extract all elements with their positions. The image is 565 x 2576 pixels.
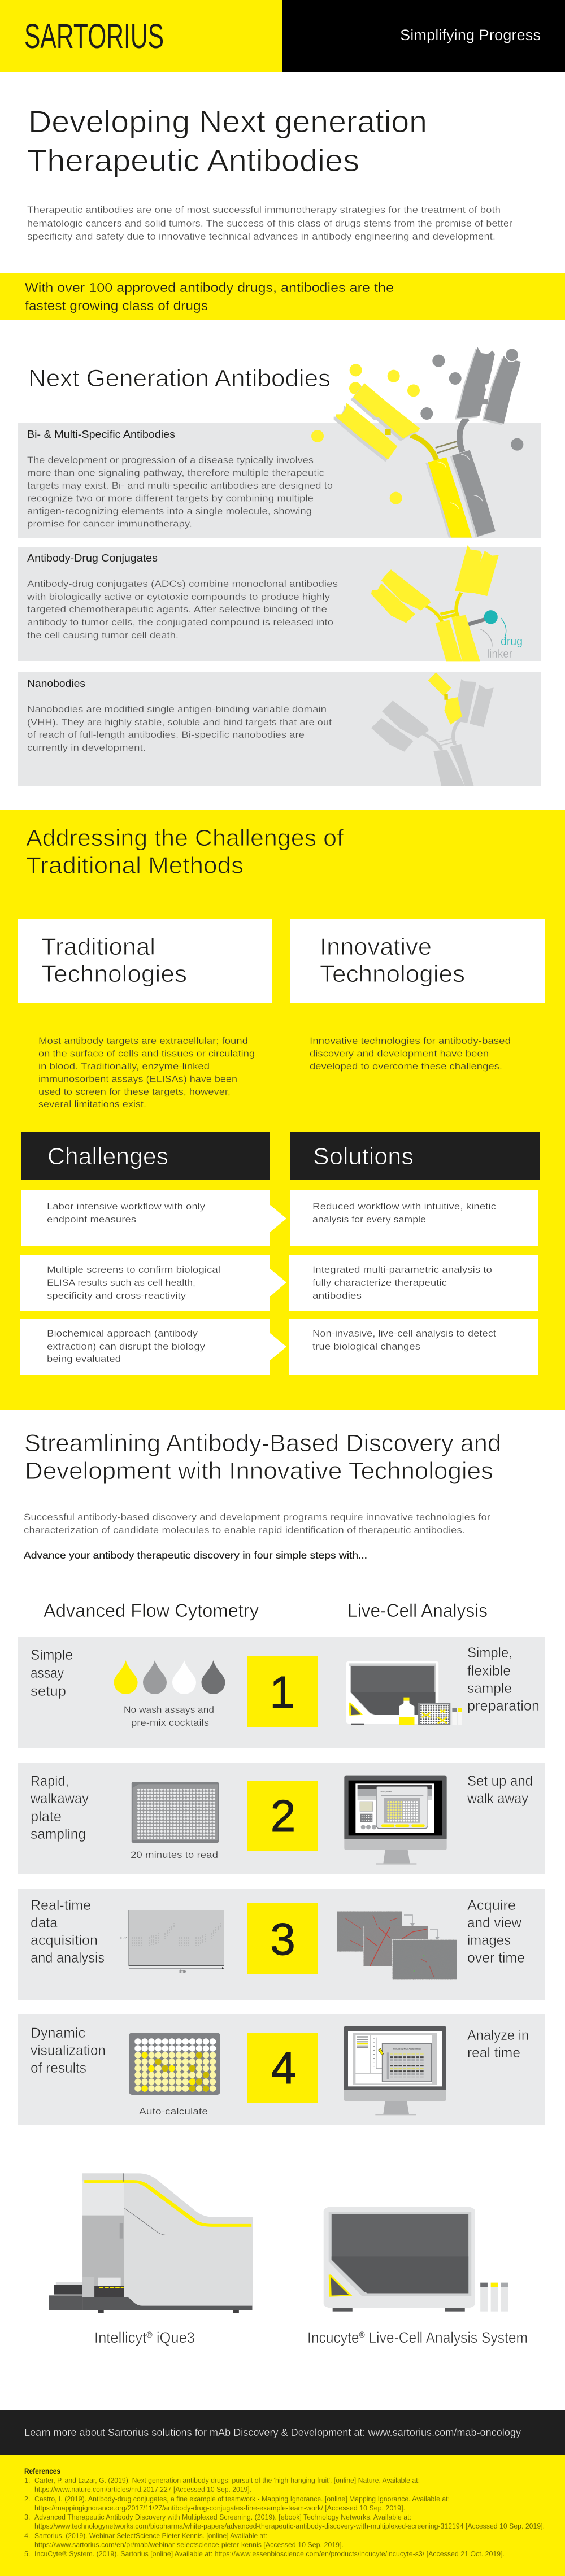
text: innovative methods: Innovative technologies for antibody-based (310, 1035, 511, 1046)
section heading (26, 825, 344, 878)
callout band: approved antibody drugs (0, 273, 565, 320)
yellow antigens (311, 364, 420, 504)
panel body text: Nanobodies are modified single antigen-binding variable domain (27, 704, 327, 715)
heading: streamlining discovery: Streamlining Antibody-Based Discovery and (24, 1430, 501, 1457)
solution card 2 (289, 1255, 538, 1311)
panel heading: Bi- & Multi-Specific Antibodies (27, 428, 175, 440)
grey bound antigen (506, 349, 518, 362)
challenge card 1 with arrow: Labor intensive workflow with only (47, 1201, 206, 1212)
reference list: https://mappingignorance.org/2017/11/27/antibody-drug-conjugates-fine-example-team-work/ [Accessed 10 Sep. 2019]. (34, 2504, 405, 2512)
label: drug: drug (501, 636, 523, 648)
step 1 left label: Simple (31, 1647, 73, 1663)
header: tagline band (282, 0, 565, 72)
reference list: Carter, P. and Lazar, G. (2019). Next generation antibody drugs: pursuit of the 'high-hanging fruit'. [online] Nature. Available at: (34, 2477, 420, 2484)
card: traditional technologies (18, 919, 272, 1003)
panel: antibody-drug conjugates (18, 547, 541, 661)
section heading: Addressing the Challenges of (26, 825, 344, 851)
label: Incucyte system: ® (359, 2330, 365, 2340)
step 2 right label (467, 1773, 533, 1807)
card: innovative technologies (290, 919, 545, 1003)
step 1 right label: flexible (467, 1663, 511, 1679)
reference list: 5. (24, 2550, 30, 2558)
challenge card 3 with arrow: being evaluated (47, 1354, 121, 1364)
panel body text: recognize two or more different targets by combining multiple (27, 493, 314, 504)
illustration: nanobody (371, 672, 494, 786)
step 1 right label (467, 1645, 540, 1714)
intro paragraph: Therapeutic antibodies are one of most successful immunotherapy strategies for the treatment of both (27, 204, 501, 215)
grey antigens (420, 355, 523, 451)
solution card 2: fully characterize therapeutic (312, 1277, 447, 1288)
panel body text: antigen-recognizing elements into a single molecule, showing (27, 506, 312, 516)
reference list: 2. (24, 2495, 30, 2503)
text: traditional methods: in blood. Traditionally, enzyme-linked (38, 1061, 210, 1072)
step 4 right label: real time (467, 2045, 520, 2061)
step number 1: 1 (270, 1667, 295, 1717)
step 4 left label: Dynamic (31, 2025, 85, 2041)
header: solutions: Solutions (313, 1143, 414, 1169)
step 2 right label: Set up and (467, 1773, 533, 1789)
icon: monitor with assay analysis software: IncuCyte Spheroid Assay Analysis (393, 2048, 421, 2050)
illustration: iQue3 instrument (49, 2173, 253, 2313)
label: Incucyte system: Incucyte (307, 2329, 364, 2346)
icon: 384-well plate (132, 1782, 219, 1843)
plate stage (49, 2282, 82, 2310)
header: challenges (21, 1132, 270, 1180)
panel: bi- and multi-specific antibodies (18, 423, 541, 538)
window bezel (329, 2212, 471, 2296)
base (82, 2297, 252, 2310)
step 3 left label (31, 1898, 105, 1966)
axis labels: Time (178, 1969, 186, 1974)
panel body text: promise for cancer immunotherapy. (27, 519, 192, 529)
step 2 left label: Rapid, (31, 1773, 69, 1789)
step number 4: 4 (271, 2043, 296, 2093)
step 2 left label: sampling (31, 1826, 86, 1842)
step 2 left label: walkaway (30, 1791, 89, 1807)
illustration: bispecific antibody with antigens (311, 347, 523, 538)
text: traditional methods: several limitations exist. (38, 1099, 146, 1109)
panel: step 2 (18, 1763, 545, 1874)
axis labels (120, 1935, 186, 1974)
text: traditional methods (38, 1035, 255, 1109)
step 1 right label: sample (467, 1681, 512, 1696)
window (332, 2214, 468, 2293)
antibody arms and stems (371, 545, 499, 661)
header: solutions (290, 1132, 540, 1180)
panel body text: Antibody-drug conjugates (ADCs) combine monoclonal antibodies (27, 578, 338, 589)
solution card 2: Integrated multi-parametric analysis to (312, 1264, 492, 1275)
chart: IL-2 over time (120, 1910, 224, 1974)
yellow arms (336, 383, 420, 459)
text: innovative methods: discovery and development have been (310, 1048, 489, 1059)
heading: streamlining discovery (24, 1430, 501, 1485)
reference list: Castro, I. (2019). Antibody-drug conjugates, a fine example of teamwork - Mapping Ignorance. [online] Mapping Ignorance. Available at: (34, 2495, 450, 2503)
panel: step 3 (18, 1889, 545, 2000)
intro paragraph: specificity and safety due to innovative technical advances in antibody engineering and development. (27, 231, 496, 242)
logo: Sartorius: SARTORIUS (24, 17, 164, 55)
step 4 left label: of results (31, 2060, 86, 2076)
left column (82, 2173, 124, 2297)
panel: nanobodies (18, 672, 541, 786)
panel body text (27, 578, 338, 641)
label: Intellicyt iQue3: iQue3 (153, 2329, 195, 2346)
streamlining paragraph (24, 1512, 490, 1535)
panel: step 4 (18, 2014, 545, 2125)
heading: next generation antibodies: Next Generation Antibodies (28, 365, 331, 392)
heading: streamlining discovery: Development with Innovative Technologies (25, 1457, 493, 1485)
header: challenges: Challenges (47, 1143, 168, 1169)
step 4 left label: visualization (31, 2043, 106, 2059)
footer band: learn more (0, 2410, 565, 2455)
panel body text: of reach of full-length antibodies. Bi-specific nanobodies are (27, 729, 305, 740)
panel body text (27, 704, 332, 753)
antibody hinges (421, 593, 461, 623)
reference list: https://www.nature.com/articles/nrd.2017.227 [Accessed 10 Sep. 2019]. (34, 2486, 251, 2494)
panel body text (27, 455, 333, 529)
step number 4 (247, 2033, 318, 2103)
section: addressing the challenges (0, 810, 565, 1410)
data points (132, 1923, 221, 1946)
intro paragraph: hematologic cancers and solid tumors. The success of this class of drugs stems from the promise of better (27, 218, 512, 229)
step 1 right label: Simple, (467, 1645, 512, 1661)
tagline: Simplifying Progress (400, 27, 541, 43)
challenge card 3 with arrow (20, 1319, 286, 1375)
step 3 right label: over time (467, 1950, 525, 1966)
step 3 right label: images (467, 1933, 511, 1948)
challenge card 2 with arrow (20, 1255, 286, 1311)
panel body text: with biologically active or cytotoxic compounds to produce highly (27, 591, 331, 602)
step 1 left label: setup (31, 1683, 66, 1699)
drug linker rod (467, 619, 486, 625)
lead-in line: Advance your antibody therapeutic discovery in four simple steps with... (24, 1550, 367, 1561)
card: traditional technologies: Traditional (41, 933, 155, 960)
axis labels: IL-2 (120, 1935, 127, 1940)
text: innovative methods (310, 1035, 511, 1072)
text: innovative methods: developed to overcome these challenges. (310, 1061, 502, 1072)
yellow stem (428, 457, 472, 538)
step 2 right label: walk away (467, 1791, 528, 1807)
card: traditional technologies: Technologies (41, 960, 187, 987)
callout band: approved antibody drugs: fastest growing class of drugs (25, 298, 208, 313)
step 3 left label: acquisition (31, 1933, 98, 1948)
card: innovative technologies: Innovative (320, 933, 432, 960)
icon: results plate (129, 2033, 220, 2095)
yellow stripe (84, 2182, 251, 2225)
panel body text: currently in development. (27, 742, 146, 753)
step 1 right label: preparation (467, 1698, 540, 1714)
housing (324, 2207, 475, 2308)
panel body text: more than one signaling pathway, therefore multiple therapeutic (27, 468, 325, 478)
title: Therapeutic Antibodies (27, 143, 359, 178)
grey arms (457, 347, 521, 424)
step 4 left label (31, 2025, 106, 2076)
challenge card 3 with arrow: Biochemical approach (antibody (47, 1328, 198, 1339)
panel heading: Antibody-Drug Conjugates (27, 552, 158, 564)
label: Intellicyt iQue3: Intellicyt (94, 2329, 150, 2346)
reference list: https://www.sartorius.com/en/pr/mab/webinar-selectscience-pieter-kennis [Accessed 10 Sep. 2019]. (34, 2541, 344, 2549)
challenge card 2 with arrow: ELISA results such as cell health, (47, 1277, 195, 1288)
reference list: IncuCyte® System. (2019). Sartorius [online] Available at: https://www.essenbioscience.com/en/products/incucyte/incucyte-s3/ [Accessed 21 Oct. 2019]. (34, 2550, 505, 2558)
solution card 1 (290, 1190, 538, 1246)
step number 1 (247, 1656, 318, 1727)
reference list: 4. (24, 2532, 30, 2540)
step 4 right label (467, 2027, 529, 2061)
illustration: Incucyte instrument (324, 2207, 508, 2312)
step 1 left label (31, 1647, 73, 1699)
icon: reagent drops (114, 1660, 225, 1694)
step number 3: 3 (270, 1914, 295, 1964)
panel body text: (VHH). They are highly stable, soluble and bind targets that are out (27, 717, 332, 728)
column heading: flow cytometry: Advanced Flow Cytometry (44, 1600, 259, 1621)
main housing (124, 2173, 253, 2306)
step 2 left label (30, 1773, 89, 1842)
references heading: References (24, 2466, 60, 2475)
text: traditional methods: immunosorbent assays (ELISAs) have been (38, 1073, 237, 1085)
solution card 1: Reduced workflow with intuitive, kinetic (312, 1201, 497, 1212)
callout line: drug (501, 618, 506, 638)
dark wells (155, 2052, 209, 2092)
step number 2 (247, 1781, 318, 1851)
solution card 3: Non-invasive, live-cell analysis to detect (312, 1328, 496, 1339)
grey hinge (459, 418, 467, 452)
grey antibody (371, 679, 494, 786)
step 2 left label: plate (31, 1809, 62, 1825)
panel body text: antibody to tumor cells, the conjugated compound is released into (27, 617, 333, 628)
step 3 right label: Acquire (467, 1898, 516, 1913)
reference list: Advanced Therapeutic Antibody Discovery with Multiplexed Screening. (2019). [ebook] Technology Networks. Available at: (34, 2513, 411, 2521)
reference list: 1. (24, 2477, 30, 2484)
title: Developing Next generation (28, 104, 427, 139)
bright wells (141, 2052, 195, 2092)
challenge card 2 with arrow: specificity and cross-reactivity (47, 1290, 186, 1301)
panel: step 1 (18, 1637, 545, 1748)
drug payload (484, 610, 498, 624)
panel body text: The development or progression of a disease typically involves (27, 455, 314, 465)
solution card 1: analysis for every sample (312, 1214, 426, 1225)
step 3 right label (467, 1898, 525, 1966)
grey arm shadows (455, 349, 519, 425)
streamlining paragraph: characterization of candidate molecules to enable rapid identification of therapeutic antibodies. (24, 1525, 465, 1535)
housing seam (82, 2208, 253, 2235)
yellow control triangle (330, 2275, 351, 2296)
yellow nanobody (428, 672, 462, 725)
step 3 right label: and view (467, 1915, 522, 1931)
step number 2: 2 (271, 1791, 295, 1841)
caption: 20 minutes to read: 20 minutes to read (131, 1850, 218, 1860)
title (27, 104, 427, 178)
step 3 left label: Real-time (31, 1898, 91, 1913)
reference list: Sartorius. (2019). Webinar SelectScience Pieter Kennis. [online] Available at: (34, 2532, 267, 2540)
panel body text: the cell causing tumor cell death. (27, 630, 179, 641)
panel body text: targets may exist. Bi- and multi-specific antibodies are designed to (27, 480, 333, 491)
card: innovative technologies: Technologies (320, 960, 465, 987)
step 3 left label: and analysis (31, 1950, 105, 1966)
footer band: learn more: Learn more about Sartorius solutions for mAb Discovery & Development at: www.sartorius.com/mab-oncology (24, 2427, 521, 2438)
stem shadows (425, 451, 494, 538)
label: linker: linker (487, 648, 512, 660)
panel body text: targeted chemotherapeutic agents. After selective binding of the (27, 604, 327, 615)
callout band: approved antibody drugs: With over 100 approved antibody drugs, antibodies are the (25, 280, 394, 295)
section heading: Traditional Methods (26, 852, 244, 878)
icon: monitor with assay analysis software (344, 2026, 446, 2115)
icon: instrument with sample preparation (346, 1661, 462, 1725)
header: logo band (0, 0, 282, 72)
icon: stacked cell images (337, 1911, 457, 1980)
yellow hinge (411, 436, 437, 460)
column heading: live-cell analysis: Live-Cell Analysis (347, 1600, 488, 1621)
references section (0, 2455, 565, 2576)
feet and button (98, 2310, 239, 2313)
label: Intellicyt iQue3: ® (146, 2330, 153, 2340)
challenge card 3 with arrow: extraction) can disrupt the biology (47, 1341, 206, 1352)
step 1 left label: assay (31, 1665, 64, 1681)
reference list: 3. (24, 2513, 30, 2521)
challenge card 1 with arrow (21, 1190, 286, 1246)
feet (333, 2308, 465, 2312)
step number 3 (247, 1903, 318, 1974)
streamlining paragraph: Successful antibody-based discovery and development programs require innovative technologies for (24, 1512, 490, 1522)
grey stem (452, 450, 496, 537)
solution card 3 (289, 1319, 538, 1375)
label: Incucyte system: Live-Cell Analysis System (365, 2329, 528, 2346)
text: traditional methods: Most antibody targets are extracellular; found (38, 1035, 248, 1046)
panel heading: Nanobodies (27, 677, 85, 689)
caption: no wash assays (124, 1704, 214, 1728)
challenge card 1 with arrow: endpoint measures (47, 1214, 136, 1225)
caption: auto-calculate: Auto-calculate (139, 2106, 208, 2117)
text: traditional methods: on the surface of cells and tissues or circulating (38, 1048, 255, 1059)
reference list (24, 2477, 545, 2558)
stem highlights (437, 454, 483, 509)
intro paragraph (27, 204, 512, 242)
challenge card 2 with arrow: Multiple screens to confirm biological (47, 1264, 220, 1275)
solution card 3: true biological changes (312, 1341, 420, 1352)
caption: no wash assays: No wash assays and (124, 1704, 214, 1715)
text: traditional methods: used to screen for these targets, however, (38, 1086, 231, 1097)
illustration: antibody-drug conjugate (371, 545, 506, 661)
icon: monitor with scan pattern software (344, 1776, 447, 1865)
bridges between chains (436, 441, 459, 453)
step 4 right label: Analyze in (467, 2027, 529, 2043)
reference list: https://www.technologynetworks.com/biopharma/white-papers/advanced-therapeutic-antibody-discovery-with-multiplexed-screening-312194 [Accessed 10 Sep. 2019]. (34, 2522, 545, 2530)
icon: monitor with scan pattern software: Scan pattern (380, 1790, 392, 1792)
yellow arm shadows (334, 386, 418, 462)
callout line: linker (480, 629, 492, 647)
step 3 left label: data (31, 1915, 58, 1931)
caption: no wash assays: pre-mix cocktails (131, 1717, 209, 1728)
solution card 2: antibodies (312, 1290, 362, 1301)
sample tubes (480, 2283, 508, 2312)
